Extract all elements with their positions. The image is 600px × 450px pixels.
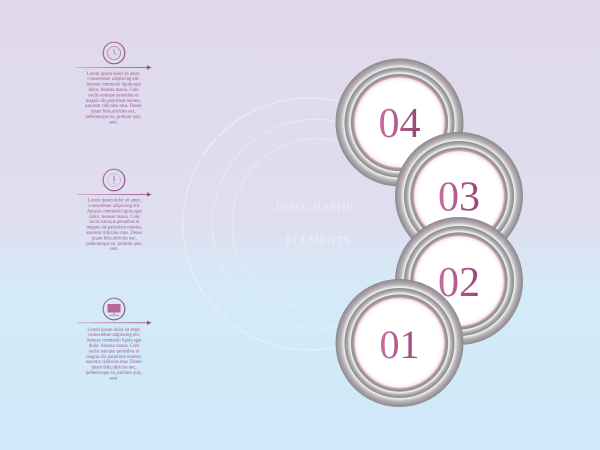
text block: pellentesque eu, pretium quis, [86, 371, 142, 376]
text block: consectetuer adipiscing elit. [88, 204, 140, 209]
circle 01: 01 [380, 322, 420, 367]
text block: magnis dis parturient montes, [87, 226, 142, 231]
text block: Lorem ipsum dolor sit amet, [87, 72, 140, 77]
arrow [77, 65, 152, 70]
text block: quam felis,ultricies nec, [91, 110, 136, 115]
circle 02 [395, 217, 523, 345]
text block: Aenean commodo ligula eget [86, 339, 142, 344]
text block: pellentesque eu, pretium quis, [85, 115, 142, 120]
text block: quam felis,ultricies nec, [92, 366, 136, 371]
text block: sociis natoque penatibus et [89, 349, 140, 354]
circle 03: 03 [438, 174, 480, 220]
text block: magnis dis parturient montes, [86, 99, 141, 104]
text block: sem. [109, 120, 118, 125]
text block: magnis dis parturient montes, [86, 355, 142, 360]
dashed arcs behind title [183, 98, 340, 350]
circle 04: 04 [378, 101, 420, 147]
arrow [77, 320, 152, 325]
title [276, 200, 358, 248]
arrow [77, 192, 152, 197]
text block: dolor. Aenean massa. Cum [89, 215, 140, 220]
block: monitor [77, 298, 152, 381]
text block: quam felis,ultricies nec, [92, 236, 137, 241]
text block: sem. [110, 247, 119, 252]
text block: dolor. Aenean massa. Cum [88, 88, 139, 93]
text block: nascetur ridiculus mus. Donec [86, 360, 142, 365]
circle 03 [395, 132, 523, 260]
text block [85, 72, 142, 125]
text block: sociis natoque penatibus et [89, 220, 140, 225]
text block: sem. [110, 376, 118, 381]
text block [86, 199, 143, 252]
text block: consectetuer adipiscing elit. [88, 333, 140, 338]
block: clock [77, 42, 152, 125]
circle 02: 02 [438, 260, 480, 306]
text block: Aenean commodo ligula eget [86, 83, 142, 88]
block: alert [77, 169, 152, 252]
text block: Aenean commodo ligula eget [87, 209, 143, 214]
text block: consectetuer adipiscing elit. [87, 77, 140, 82]
text block: Lorem ipsum dolor sit amet, [88, 199, 141, 204]
text block: nascetur ridiculus mus. Donec [85, 104, 142, 109]
text block: Lorem ipsum dolor sit amet, [87, 328, 141, 333]
text block: sociis natoque penatibus et [88, 93, 139, 98]
text block: pellentesque eu, pretium quis, [86, 242, 142, 247]
text block: nascetur ridiculus mus. Donec [86, 231, 143, 236]
text block [86, 328, 142, 381]
icon: exclamation [103, 169, 125, 191]
circle 04 [336, 58, 464, 186]
circle 01 [336, 279, 464, 407]
title: ELEMENTS [286, 234, 350, 248]
icon: monitor [103, 298, 125, 320]
icon: clock [103, 42, 125, 64]
text block: dolor. Aenean massa. Cum [89, 344, 139, 349]
title: INFOGRAPHIC [276, 200, 358, 214]
